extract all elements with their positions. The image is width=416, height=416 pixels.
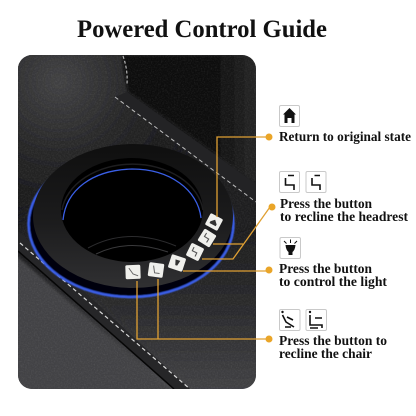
- label: Press the button to: [279, 333, 387, 348]
- item: recline the chair: [279, 310, 387, 361]
- leader: light: [183, 270, 268, 272]
- item: control the light: [279, 238, 388, 289]
- label: recline the chair: [279, 346, 372, 361]
- label: to recline the headrest: [280, 209, 408, 224]
- label: Return to original state: [279, 129, 411, 144]
- stitching upper: [115, 97, 256, 202]
- icon: light bulb: [280, 238, 300, 258]
- photo: leather armrest with cup holder: [18, 55, 256, 389]
- button: chair upright: [148, 262, 164, 278]
- label: Press the button: [280, 196, 372, 211]
- label: to control the light: [279, 274, 388, 289]
- leader dots: [266, 134, 276, 342]
- button: chair recline: [125, 265, 141, 279]
- icon: home: [280, 106, 300, 126]
- item: return to original state: [279, 106, 411, 144]
- cup hole: [61, 158, 203, 262]
- lower left leather: [18, 256, 112, 389]
- stitching lower: [20, 243, 190, 389]
- title: Powered Control Guide: [77, 14, 327, 43]
- stitching cushion: [123, 56, 127, 84]
- leader: home: [217, 137, 268, 217]
- control buttons: [125, 213, 223, 279]
- seam band upper: [115, 92, 256, 204]
- leather cushion upper left: [18, 55, 178, 215]
- seam band lower: [22, 251, 190, 389]
- leader: chair: [137, 279, 268, 339]
- icon: headrest buttons: [280, 172, 326, 192]
- lower right leather: [146, 343, 256, 389]
- button: light: [168, 254, 186, 272]
- lower cup ledge: [88, 236, 176, 248]
- icon: chair buttons: [280, 310, 326, 330]
- dark backrest wedge: [122, 55, 256, 182]
- label: Press the button: [279, 261, 372, 276]
- leader lines: [137, 137, 270, 339]
- leader: headrest: [202, 207, 270, 259]
- button: headrest up: [197, 228, 217, 248]
- button: headrest down: [186, 243, 204, 261]
- leather grain: [18, 55, 256, 389]
- black bezel ring: [33, 144, 233, 288]
- blue inner light arc: [63, 169, 201, 220]
- button: home: [205, 213, 223, 231]
- item: recline the headrest: [280, 172, 408, 224]
- blue outer light ring: [26, 180, 236, 299]
